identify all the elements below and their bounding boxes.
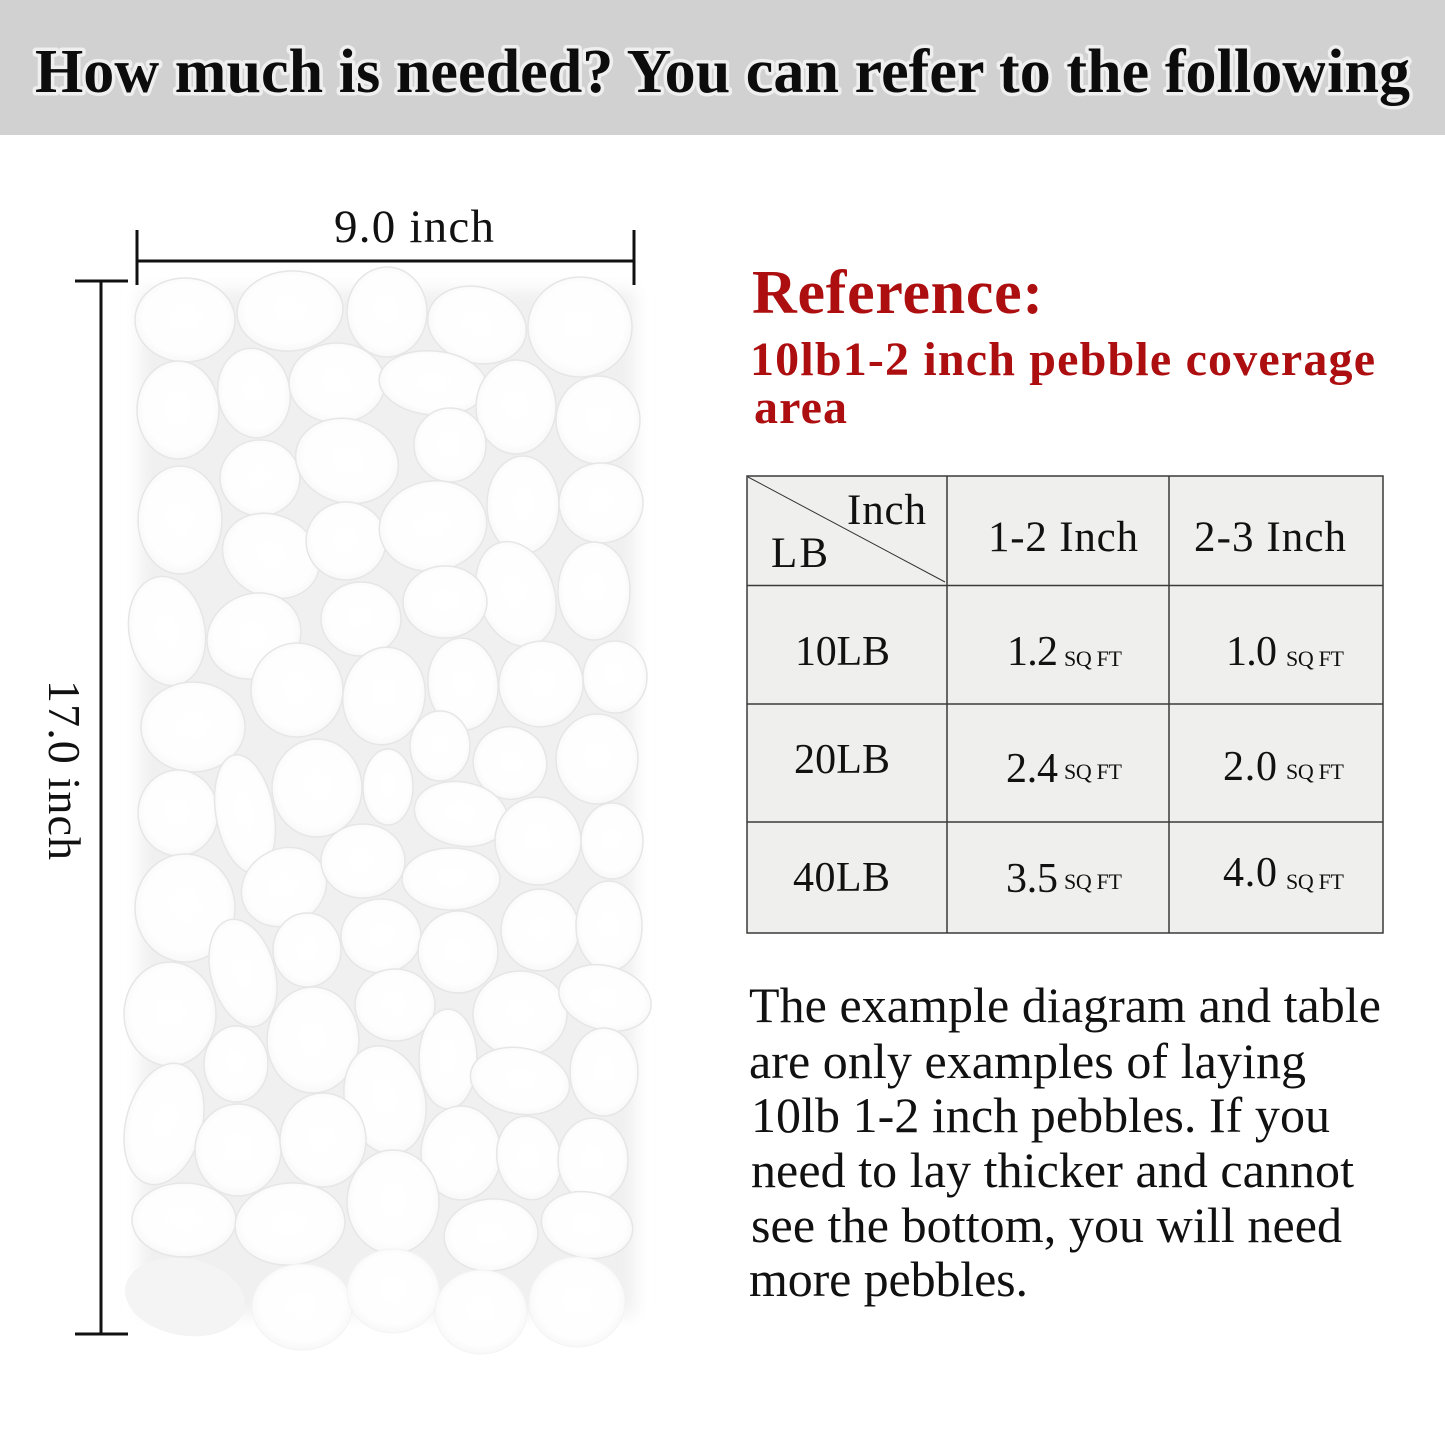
- explanatory paragraph: 10lb 1-2 inch pebbles. If you: [751, 1087, 1330, 1143]
- table header row: [771, 487, 1346, 577]
- row: 40LB: 3.5: [1006, 856, 1058, 902]
- height dimension: 17.0 inch: [39, 281, 128, 1334]
- explanatory paragraph: [749, 977, 1381, 1307]
- row: 20LB: SQ FT: [1064, 759, 1123, 784]
- height dimension: 17.0 inch: 17.0 inch: [39, 680, 90, 860]
- row: 40LB: SQ FT: [1286, 869, 1345, 894]
- explanatory paragraph: are only examples of laying: [749, 1033, 1306, 1089]
- row: 40LB: 4.0: [1223, 850, 1277, 896]
- row: 40LB: [793, 850, 1345, 902]
- width dimension: 9.0 inch: [137, 201, 634, 285]
- row: 20LB: 20LB: [794, 737, 890, 783]
- header banner: [0, 0, 1445, 135]
- row: 10LB: SQ FT: [1064, 646, 1123, 671]
- table header row: LB: [771, 530, 828, 577]
- row: 10LB: 1.0: [1226, 629, 1277, 675]
- row: 10LB: 10LB: [795, 629, 890, 675]
- pebble layout photo: [111, 267, 659, 1354]
- explanatory paragraph: need to lay thicker and cannot: [751, 1142, 1354, 1198]
- title: How much is needed? You can refer to the following: [35, 38, 1410, 106]
- subheading: pebble coverage area: 10lb1-2 inch pebble coverage: [750, 333, 1375, 386]
- row: 40LB: SQ FT: [1064, 869, 1123, 894]
- row: 10LB: [795, 629, 1345, 675]
- explanatory paragraph: see the bottom, you will need: [751, 1197, 1342, 1253]
- table header row: 1-2 Inch: [988, 514, 1138, 561]
- row: 20LB: SQ FT: [1286, 759, 1345, 784]
- explanatory paragraph: The example diagram and table: [749, 977, 1381, 1033]
- coverage table: [747, 476, 1383, 933]
- explanatory paragraph: more pebbles.: [749, 1251, 1028, 1307]
- row: 10LB: SQ FT: [1286, 646, 1345, 671]
- width dimension: 9.0 inch: 9.0 inch: [334, 201, 494, 253]
- row: 20LB: 2.4: [1006, 746, 1058, 792]
- row: 20LB: [794, 737, 1345, 792]
- table header row: 2-3 Inch: [1194, 514, 1346, 561]
- row: 20LB: 2.0: [1223, 744, 1277, 790]
- row: 40LB: 40LB: [793, 855, 890, 901]
- subheading: pebble coverage area: area: [754, 381, 847, 434]
- heading: Reference: Reference:: [752, 259, 1043, 327]
- row: 10LB: 1.2: [1007, 629, 1058, 675]
- table header row: Inch: [847, 487, 926, 534]
- subheading: pebble coverage area: [750, 333, 1375, 434]
